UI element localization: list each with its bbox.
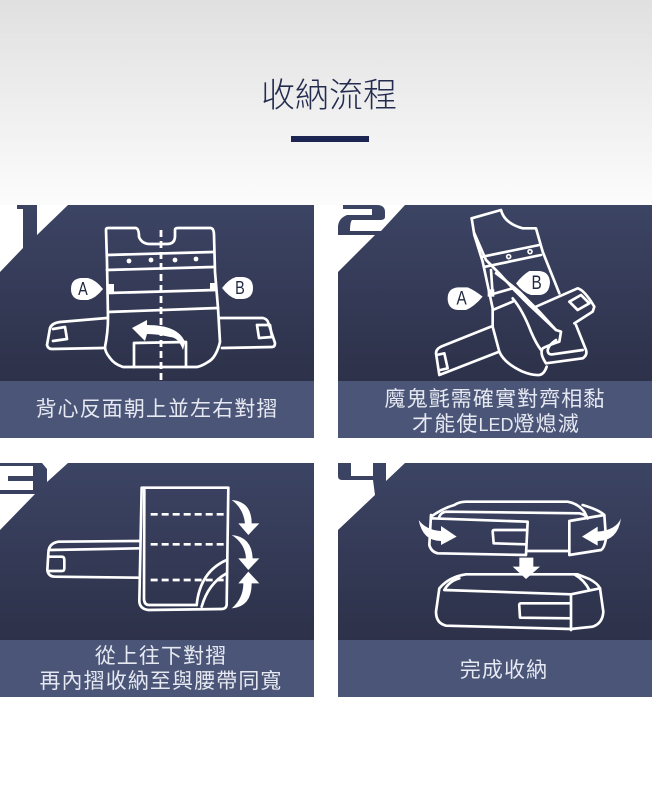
panel: step 2 — [338, 205, 652, 438]
step 2 caption bar — [338, 381, 652, 438]
panel: step 4 — [338, 463, 652, 697]
step 2 caption: 才能使LED燈熄滅 — [412, 413, 580, 436]
step 2 folded vest illustration — [436, 210, 594, 375]
step 2 caption — [384, 388, 606, 436]
label bubble A — [71, 278, 103, 300]
step 4 caption bar — [338, 640, 652, 697]
step 3 folded vest illustration — [47, 488, 228, 610]
step 1 vest illustration — [47, 228, 275, 380]
title: 收納流程 — [261, 77, 397, 115]
step 2 caption: 魔鬼氈需確實對齊相黏 — [384, 388, 606, 411]
step 3 caption bar — [0, 640, 314, 697]
label bubble A: A — [457, 287, 467, 309]
inward arrows — [419, 518, 621, 546]
fold arrows — [232, 500, 259, 608]
label bubble B: B — [532, 271, 542, 293]
label bubble A — [448, 287, 483, 310]
step 1 background with numeral — [0, 205, 314, 382]
step 1 caption bar — [0, 381, 314, 438]
step 3 caption — [39, 645, 283, 693]
step 3 caption: 從上往下對摺 — [95, 645, 227, 668]
step 4 caption: 完成收納 — [460, 659, 548, 682]
step 1 caption: 背心反面朝上並左右對摺 — [35, 398, 279, 421]
panel: step 1 — [0, 205, 314, 438]
label bubble B: B — [235, 277, 245, 298]
step 2 background with numeral — [338, 205, 652, 382]
label bubble A: A — [78, 278, 89, 299]
label bubble B — [222, 277, 253, 299]
step 4 belt illustration — [429, 502, 606, 630]
panel: step 3 — [0, 463, 314, 697]
label bubble B — [516, 271, 550, 295]
title underline — [291, 136, 369, 142]
step 3 background with numeral — [0, 463, 314, 642]
step 4 background with numeral — [338, 463, 652, 642]
down arrow — [513, 558, 540, 579]
step 3 caption: 再內摺收納至與腰帶同寬 — [39, 670, 283, 693]
